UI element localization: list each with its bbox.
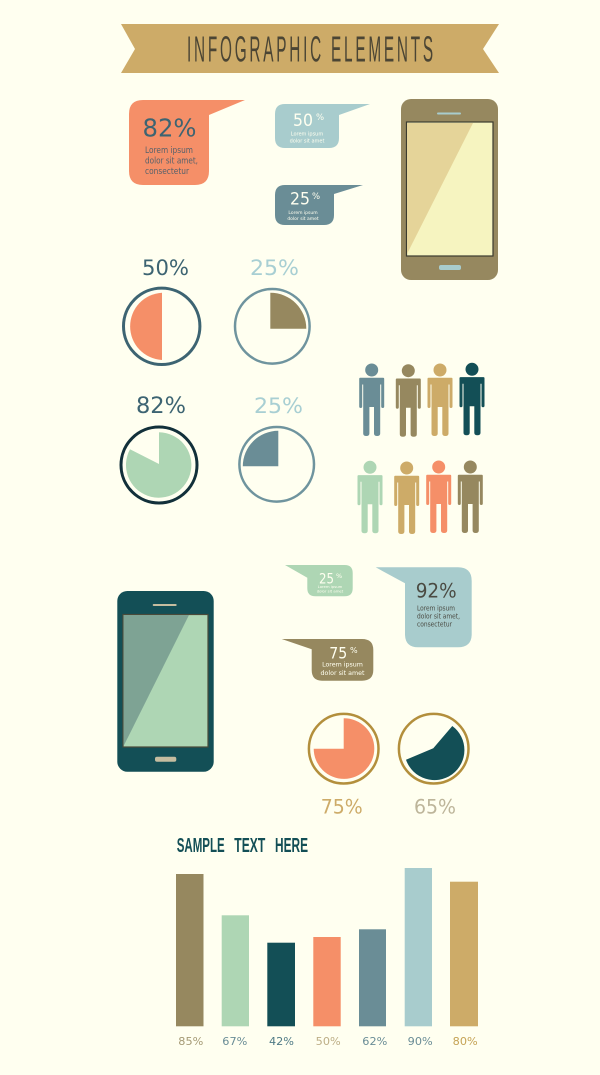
label: 75%: 75% (321, 795, 363, 818)
callout: 25% green (285, 565, 353, 596)
person 7 (426, 460, 451, 533)
chart heading: HERE (275, 834, 308, 857)
callout: 50% light blue: Lorem ipsum (291, 132, 323, 138)
bar: 50%: 50% (316, 1035, 341, 1048)
callout: 75% tan: % (350, 646, 358, 655)
person 4 (460, 363, 484, 435)
callout: 82% orange (129, 100, 245, 185)
bar: 90% (405, 868, 433, 1048)
person 3 (428, 364, 452, 436)
callout: 25% slate: dolor sit amet (287, 216, 319, 222)
pie: 75% (309, 714, 379, 784)
callout: 25% slate: % (312, 192, 320, 202)
pie: 25% top left (239, 427, 314, 502)
callout: 25% green: 25 (319, 571, 334, 587)
person 6 (394, 462, 419, 534)
callout: 82% orange: 82% (142, 114, 196, 142)
bar: 42%: 42% (269, 1035, 294, 1048)
bar: 90%: 90% (408, 1035, 433, 1048)
person 5 (358, 461, 382, 533)
callout: 92% light blue: consectetur (417, 619, 452, 628)
bar: 85% (176, 874, 204, 1048)
callout: 25% green: Lorem ipsum (318, 584, 343, 589)
label: 82%: 82% (136, 394, 186, 419)
bar: 62%: 62% (362, 1035, 387, 1048)
bar: 67% (222, 915, 249, 1048)
bar: 50% (313, 937, 341, 1048)
bar chart (176, 868, 478, 1048)
callout: 82% orange: Lorem ipsum (145, 146, 193, 156)
bar: 67%: 67% (222, 1035, 247, 1048)
callout: 50% light blue (275, 104, 370, 148)
label: 50%: 50% (142, 256, 189, 280)
label: 25%: 25% (250, 256, 299, 280)
callout: 82% orange: dolor sit amet, (145, 156, 198, 166)
icon: phone tan (401, 99, 498, 280)
bar: 62% (359, 929, 387, 1048)
callout: 25% slate: 25 (290, 190, 310, 210)
callout: 50% light blue: dolor sit amet (290, 138, 324, 144)
callout: 92% light blue: 92% (416, 580, 457, 603)
callout: 75% tan: dolor sit amet (321, 670, 365, 677)
title banner (121, 24, 499, 73)
callout: 92% light blue: Lorem ipsum (417, 603, 455, 612)
callout: 25% slate: Lorem ipsum (288, 210, 318, 216)
chart heading: SAMPLE (177, 834, 225, 857)
callout: 92% light blue (376, 567, 472, 647)
callout: 25% green: dolor sit amet (317, 588, 344, 593)
callout: 82% orange: consectetur (145, 167, 189, 177)
bar: 42% (267, 943, 295, 1048)
person 1 (359, 364, 384, 436)
callout: 75% tan: 75 (329, 643, 347, 662)
pie: 65% (399, 714, 469, 784)
callout: 92% light blue: dolor sit amet, (417, 611, 460, 620)
title: INFOGRAPHIC ELEMENTS (187, 29, 433, 69)
callout: 50% light blue: % (316, 113, 324, 123)
callout: 25% slate (275, 185, 363, 225)
bar: 80%: 80% (453, 1035, 478, 1048)
callout: 25% green: % (336, 572, 342, 580)
bar: 80% (450, 882, 478, 1048)
people group (358, 363, 484, 534)
chart heading: TEXT (234, 834, 266, 857)
person 2 (396, 364, 421, 437)
bar: 85%: 85% (178, 1035, 203, 1048)
label: 65%: 65% (414, 795, 456, 818)
person 8 (458, 460, 483, 533)
pie: 82% (121, 427, 197, 503)
icon: phone teal (117, 591, 214, 772)
label: 25%: 25% (254, 394, 303, 418)
callout: 50% light blue: 50 (293, 111, 313, 131)
callout: 75% tan: Lorem ipsum (322, 662, 363, 669)
pie: 50% (124, 288, 200, 364)
callout: 75% tan (282, 639, 373, 681)
pie: 25% top right (235, 289, 310, 364)
